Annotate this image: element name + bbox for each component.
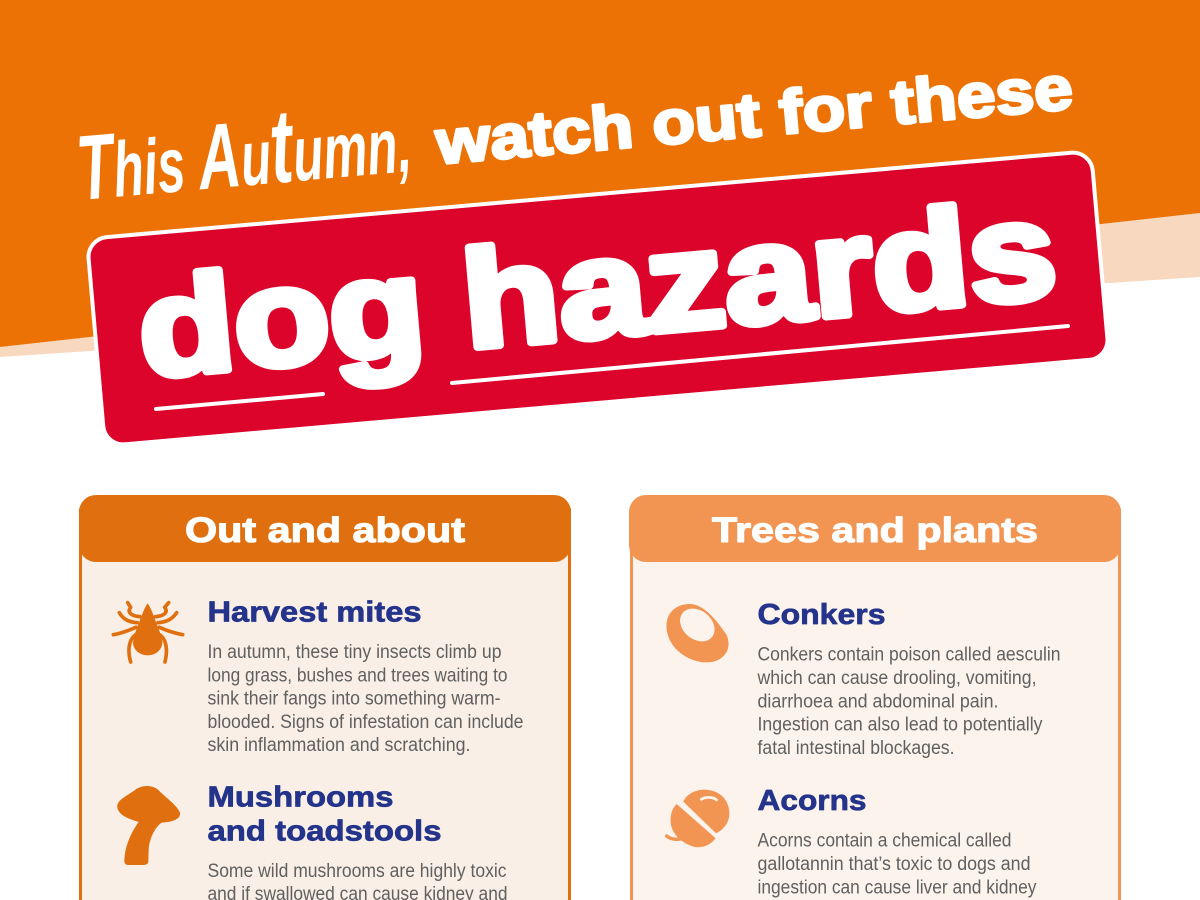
icon: conker	[666, 602, 729, 662]
item text: acorns	[758, 831, 1037, 898]
item heading: mushrooms and toadstools: and toadstools	[208, 816, 442, 848]
item text: acorns: gallotannin that’s toxic to dogs and	[758, 854, 1030, 875]
item heading: mushrooms and toadstools	[208, 782, 442, 848]
item heading: acorns: Acorns	[758, 785, 866, 817]
item text: conkers: which can cause drooling, vomiting,	[757, 668, 1036, 689]
item text: harvest mites: skin inflammation and scratching.	[208, 735, 470, 756]
panel: trees and plants	[629, 495, 1121, 900]
icon: mushroom	[117, 786, 180, 865]
peach background band	[0, 213, 1200, 357]
item text: harvest mites: In autumn, these tiny insects climb up	[208, 642, 502, 663]
orange header background	[0, 0, 1200, 347]
item text: acorns: ingestion can cause liver and kidney	[758, 877, 1037, 898]
item heading: conkers: Conkers	[758, 599, 886, 631]
item text: harvest mites: long grass, bushes and trees waiting to	[208, 665, 508, 686]
panel: out and about	[79, 495, 571, 900]
item text: harvest mites	[208, 642, 524, 756]
panel heading: trees and plants	[629, 495, 1121, 562]
icon: tick	[113, 603, 183, 662]
red title banner: dog hazards	[87, 151, 1109, 446]
item text: conkers: Conkers contain poison called aesculin	[758, 645, 1060, 666]
item heading: mushrooms and toadstools: Mushrooms	[208, 782, 394, 814]
red title banner: dog hazards: hazards	[456, 173, 1062, 378]
title line: This Autumn, watch out for these: This Autumn,	[72, 76, 415, 223]
item text: acorns: Acorns contain a chemical called	[758, 831, 1012, 852]
title line: This Autumn, watch out for these: watch out for these	[432, 52, 1075, 177]
item text: harvest mites: sink their fangs into something warm-	[208, 689, 500, 710]
item text: conkers: Ingestion can also lead to potentially	[758, 715, 1043, 736]
item text: conkers	[757, 645, 1060, 759]
item text: harvest mites: blooded. Signs of infestation can include	[208, 712, 524, 733]
item heading: harvest mites: Harvest mites	[208, 596, 422, 628]
item text: conkers: fatal intestinal blockages.	[758, 738, 954, 759]
item text: mushrooms: Some wild mushrooms are highly toxic	[208, 861, 506, 882]
panel heading: trees and plants: Trees and plants	[712, 511, 1038, 550]
item text: conkers: diarrhoea and abdominal pain.	[758, 691, 998, 712]
panel heading: out and about	[79, 495, 571, 562]
item text: mushrooms	[208, 861, 508, 900]
panel heading: out and about: Out and about	[185, 511, 465, 550]
red title banner: dog hazards: dog	[132, 229, 430, 407]
title line: This Autumn, watch out for these	[72, 52, 1075, 223]
icon: acorn	[667, 790, 729, 847]
